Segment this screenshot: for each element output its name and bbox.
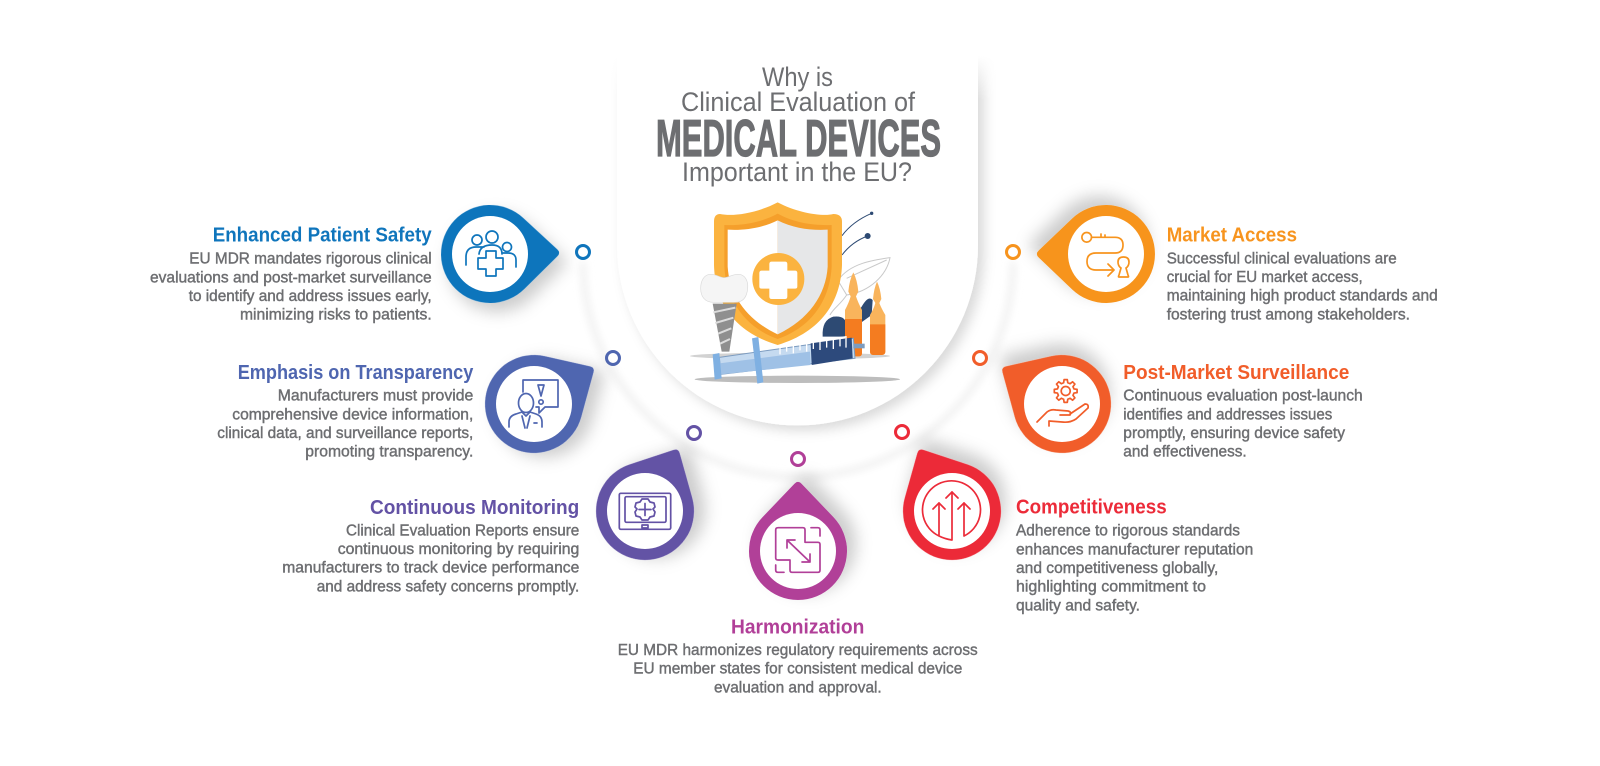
description: to identify and address issues early,: [189, 288, 432, 305]
description: maintaining high product standards and: [1167, 288, 1438, 305]
description: Successful clinical evaluations are: [1167, 250, 1397, 267]
description: [282, 522, 579, 595]
ring marker: [606, 352, 620, 364]
ring marker: [974, 352, 986, 364]
title: Important in the EU?: [682, 157, 912, 187]
description: minimizing risks to patients.: [240, 306, 432, 323]
description: Clinical Evaluation Reports ensure: [346, 522, 579, 539]
description: [618, 642, 978, 696]
illustration: shield with medical devices: [690, 202, 900, 384]
description: and competitiveness globally,: [1016, 560, 1218, 577]
panel: Harmonization: [618, 452, 978, 696]
description: Continuous evaluation post-launch: [1123, 388, 1363, 405]
description: promoting transparency.: [305, 444, 473, 461]
description: promptly, ensuring device safety: [1123, 425, 1345, 442]
description: EU member states for consistent medical device: [633, 661, 962, 678]
description: Adherence to rigorous standards: [1016, 523, 1240, 540]
panel: Emphasis on Transparency: [217, 326, 620, 471]
description: continuous monitoring by requiring: [338, 541, 579, 558]
ring marker: [792, 452, 804, 466]
panel: Post-Market Surveillance: [974, 326, 1363, 471]
panel: Market Access: [1006, 205, 1438, 323]
heading: Competitiveness: [1016, 497, 1167, 519]
description: [150, 251, 432, 323]
ring marker: [576, 246, 590, 258]
title: Why is: [762, 62, 833, 92]
description: manufacturers to track device performance: [282, 560, 579, 577]
pin icon: [467, 326, 619, 471]
heading: Harmonization: [731, 616, 864, 638]
description: clinical data, and surveillance reports,: [217, 425, 473, 442]
description: EU MDR harmonizes regulatory requirements across: [618, 642, 978, 659]
description: enhances manufacturer reputation: [1016, 541, 1253, 558]
heading: Enhanced Patient Safety: [213, 225, 433, 247]
description: evaluation and approval.: [714, 679, 882, 696]
description: highlighting commitment to: [1016, 579, 1206, 596]
description: [217, 387, 473, 461]
description: and address safety concerns promptly.: [317, 578, 579, 595]
pin icon: [749, 482, 847, 600]
description: [1123, 388, 1363, 461]
heading: Market Access: [1167, 225, 1297, 247]
panel: central shield background: [595, 20, 1005, 426]
panel: Competitiveness: [876, 426, 1253, 614]
ring marker: [688, 426, 700, 440]
description: evaluations and post-market surveillance: [150, 269, 432, 286]
connecting arc: [583, 262, 1013, 477]
title: Clinical Evaluation of: [681, 87, 915, 117]
description: and effectiveness.: [1123, 444, 1247, 461]
pin icon: [579, 427, 721, 577]
heading: Emphasis on Transparency: [238, 362, 474, 384]
description: identifies and addresses issues: [1123, 406, 1332, 423]
panel: Continuous Monitoring: [282, 426, 721, 595]
description: Manufacturers must provide: [278, 387, 473, 404]
heading: Post-Market Surveillance: [1123, 362, 1349, 384]
description: fostering trust among stakeholders.: [1167, 306, 1410, 323]
panel: Enhanced Patient Safety: [150, 204, 590, 323]
pin icon: [876, 427, 1018, 577]
description: [1016, 523, 1253, 614]
description: quality and safety.: [1016, 597, 1140, 614]
description: crucial for EU market access,: [1167, 269, 1363, 286]
description: EU MDR mandates rigorous clinical: [189, 251, 432, 268]
ring marker: [1006, 246, 1020, 258]
pin icon: [440, 204, 560, 304]
description: [1167, 250, 1438, 323]
heading: Continuous Monitoring: [370, 497, 579, 519]
ring marker: [896, 426, 908, 438]
description: comprehensive device information,: [232, 406, 473, 423]
pin icon: [977, 326, 1129, 471]
title: [656, 62, 941, 187]
pin icon: [1037, 205, 1155, 303]
title: MEDICAL DEVICES: [656, 110, 941, 168]
